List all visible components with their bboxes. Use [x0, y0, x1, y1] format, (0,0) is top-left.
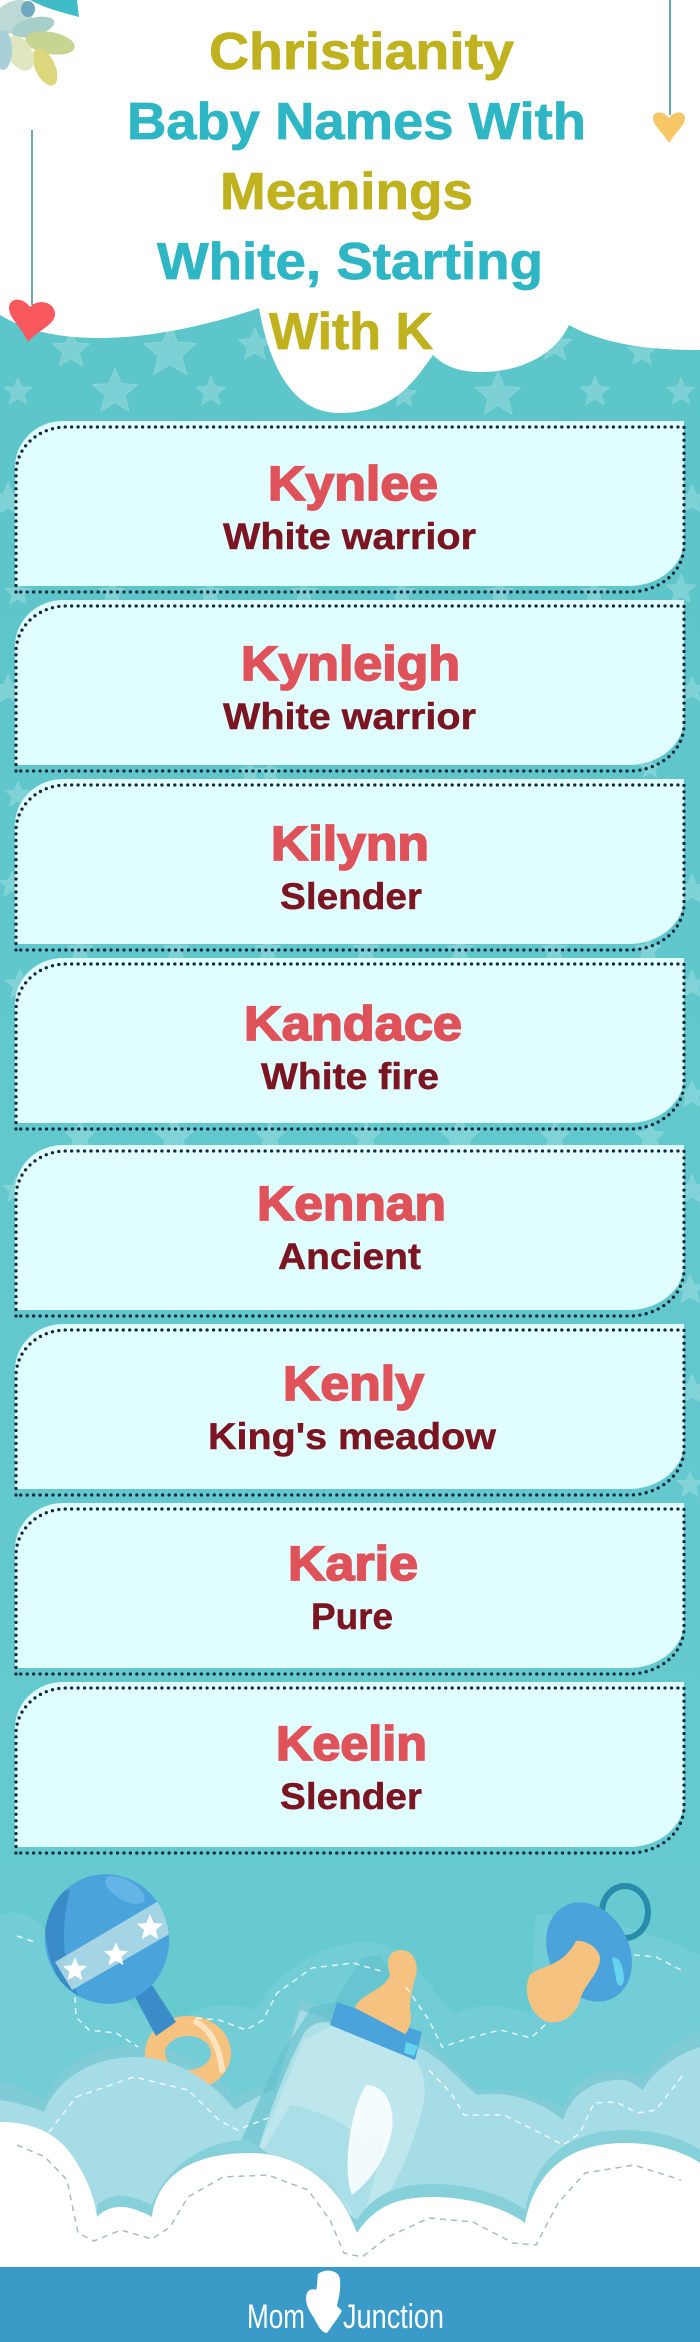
card: Karie: Karie: [288, 1538, 418, 1591]
white top cloud: [0, 0, 700, 413]
logo: [247, 2271, 444, 2336]
card: Kynlee: White warrior: [223, 516, 476, 557]
card: Kandace: Kandace: [244, 998, 462, 1051]
card: Kilynn: Slender: [280, 876, 422, 917]
rattle ring: [155, 2022, 222, 2080]
strip behind white cloud: [97, 2130, 700, 2260]
footer band: [0, 2267, 700, 2342]
card: Keelin: Slender: [280, 1776, 422, 1817]
card: Kynleigh: Kynleigh: [241, 638, 460, 691]
title: White, Starting: [157, 233, 543, 291]
pacifier ring: [602, 1886, 648, 1938]
card: Kenly: [15, 1324, 684, 1495]
title: With K: [269, 303, 433, 361]
hanging yellow heart: [653, 0, 685, 143]
card: Kenly: King's meadow: [208, 1416, 496, 1457]
card: Kennan: [15, 1145, 684, 1316]
light cloud: [0, 2010, 700, 2240]
pacifier teat: [527, 1941, 600, 2022]
card: Kenly: Kenly: [283, 1358, 424, 1411]
rattle: [44, 1874, 176, 2036]
card: Karie: Pure: [311, 1596, 393, 1637]
bottle collar: [330, 2002, 422, 2060]
title: Meanings: [220, 163, 473, 221]
card: Karie: [15, 1503, 684, 1674]
dashed stitching: [17, 1936, 683, 2145]
rattle handle: [134, 1985, 176, 2036]
title: Christianity: [209, 23, 514, 81]
logo figure: [306, 2271, 342, 2333]
mid cloud edge: [0, 2000, 700, 2200]
card: Kilynn: Kilynn: [271, 818, 429, 871]
grey stitching on cloud: [17, 2145, 681, 2257]
pacifier disc: [529, 1887, 649, 2017]
hanging red heart: [9, 130, 55, 342]
title: Baby Names With: [127, 93, 586, 151]
card: Kilynn: [15, 779, 684, 950]
rattle head: [33, 1863, 181, 2015]
icon: watercolor leaves: [0, 0, 77, 89]
card: Kynleigh: White warrior: [223, 696, 476, 737]
rattle stars: [64, 1915, 162, 1980]
card: Kynleigh: [15, 600, 684, 771]
back cloud layer: [0, 1912, 700, 2200]
card: Kynlee: Kynlee: [268, 458, 438, 511]
title: [127, 23, 586, 361]
star pattern: [0, 324, 700, 1496]
baby bottle: [257, 1950, 425, 2233]
white bottom cloud: [0, 2122, 700, 2270]
logo wordmark right: Junction: [343, 2298, 444, 2336]
card: Kandace: [15, 958, 684, 1129]
card: Kandace: White fire: [261, 1056, 439, 1097]
bottle shadow: [237, 1955, 400, 2153]
pacifier highlight: [612, 1957, 624, 1986]
collar highlight: [404, 2042, 418, 2056]
card: Keelin: [15, 1682, 684, 1853]
bottle nipple: [355, 1950, 417, 2034]
logo wordmark left: Mom: [247, 2298, 305, 2336]
card: Kennan: Ancient: [278, 1236, 421, 1277]
corner triangle: [30, 0, 79, 17]
card: Keelin: Keelin: [276, 1718, 427, 1771]
rattle band: [45, 1876, 169, 1996]
card: Kynlee: [15, 421, 684, 592]
pacifier: [527, 1886, 649, 2022]
card: Kennan: Kennan: [257, 1178, 446, 1231]
